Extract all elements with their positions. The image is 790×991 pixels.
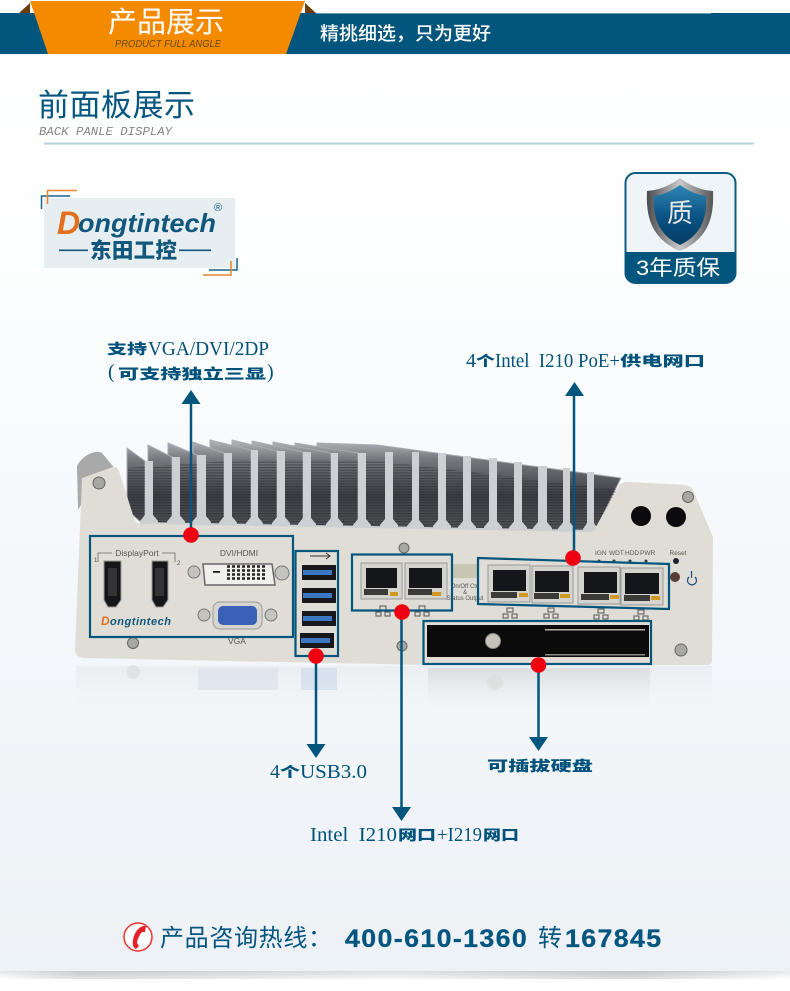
brand logo: 东田工控: [90, 238, 177, 263]
arrow: hard drive: [529, 657, 548, 751]
label: PoE ports: [466, 350, 705, 372]
label: USB: [270, 761, 367, 783]
arrow: USB: [306, 648, 326, 758]
section heading: 前面板展示: [38, 88, 195, 123]
arrow: display outputs: [182, 390, 200, 543]
hard drive tray: [427, 625, 649, 657]
warranty badge: [625, 173, 736, 283]
display ports: 1: [94, 558, 98, 564]
display ports: [94, 548, 181, 607]
header banner: [0, 1, 790, 54]
product: fanless industrial computer: [75, 440, 713, 665]
status LEDs and power: PWR: [640, 550, 655, 557]
PoE LAN ports: [488, 565, 663, 620]
section heading: [38, 88, 195, 139]
screws: [93, 477, 694, 656]
panel logo: ongtintech: [110, 616, 171, 628]
label: LAN: +I219: [437, 824, 482, 846]
antenna ports: [631, 506, 686, 527]
badge caption: 3年质保: [636, 257, 720, 280]
LAN ports left: [361, 563, 447, 616]
display ports: 2: [177, 561, 181, 567]
brand logo: D: [57, 205, 80, 241]
arrow: PoE: [565, 382, 584, 566]
banner subtitle: PRODUCT FULL ANGLE: [115, 39, 221, 50]
status LEDs and power: [595, 550, 697, 585]
status LEDs and power: Reset: [670, 550, 687, 557]
product reflection: [76, 665, 712, 716]
label: PoE ports: 4: [466, 350, 476, 372]
label: LAN: [310, 824, 519, 846]
front panel: [75, 467, 713, 665]
arrow: LAN: [392, 604, 411, 821]
status LEDs and power: IGN: [595, 550, 607, 557]
hotline: 400-610-1360: [345, 926, 528, 953]
label: hard drive: 可插拔硬盘: [487, 756, 593, 776]
hotline: 转: [538, 925, 562, 952]
label: LAN: 网口: [398, 825, 436, 845]
label: USB: 4: [270, 761, 280, 783]
banner title: 产品展示: [108, 6, 224, 39]
connector block: [447, 564, 484, 602]
label: USB: USB3.0: [300, 761, 367, 783]
hotline: 167845: [565, 926, 663, 953]
VGA port: VGA: [228, 636, 246, 646]
connector block: &: [463, 590, 467, 596]
hotline: [124, 923, 663, 953]
brand logo: ongtintech: [78, 208, 216, 238]
VGA port: [198, 602, 277, 646]
left bracket: [77, 452, 116, 510]
label: LAN: 网口: [483, 825, 519, 845]
icon: phone: [124, 923, 152, 951]
label: display outputs: [107, 338, 274, 384]
label: display outputs: 支持: [107, 339, 147, 359]
brand logo: [42, 190, 237, 275]
banner slogan: 精挑细选，只为更好: [320, 23, 491, 44]
icon: shield: 质: [667, 198, 693, 228]
label: display outputs: ): [267, 361, 274, 383]
label: display outputs: 可支持独立三显: [118, 364, 266, 384]
connector block: Status Output: [447, 596, 484, 602]
label: display outputs: (: [108, 361, 115, 383]
label: PoE ports: 供电网口: [620, 351, 705, 371]
callout boxes: [90, 536, 669, 664]
label: PoE ports: 个: [476, 351, 495, 371]
DVI port: [188, 548, 289, 585]
panel logo: D: [101, 614, 110, 628]
label: LAN: Intel I210: [310, 824, 397, 846]
connector block: On/Off Ctrl: [451, 584, 479, 590]
section subtitle: BACK PANLE DISPLAY: [39, 125, 173, 139]
status LEDs and power: HDD: [625, 550, 639, 557]
DVI port: DVI/HDMI: [220, 548, 258, 558]
label: PoE ports: Intel I210 PoE+: [495, 350, 620, 372]
display ports: DisplayPort: [115, 548, 159, 558]
brand logo: ®: [214, 202, 222, 214]
label: USB: 个: [280, 762, 300, 782]
status LEDs and power: WDT: [609, 550, 624, 557]
USB ports: [300, 553, 336, 648]
label: display outputs: VGA/DVI/2DP: [148, 338, 269, 360]
heatsink fins: [127, 440, 621, 534]
hotline: 产品咨询热线：: [160, 925, 332, 952]
